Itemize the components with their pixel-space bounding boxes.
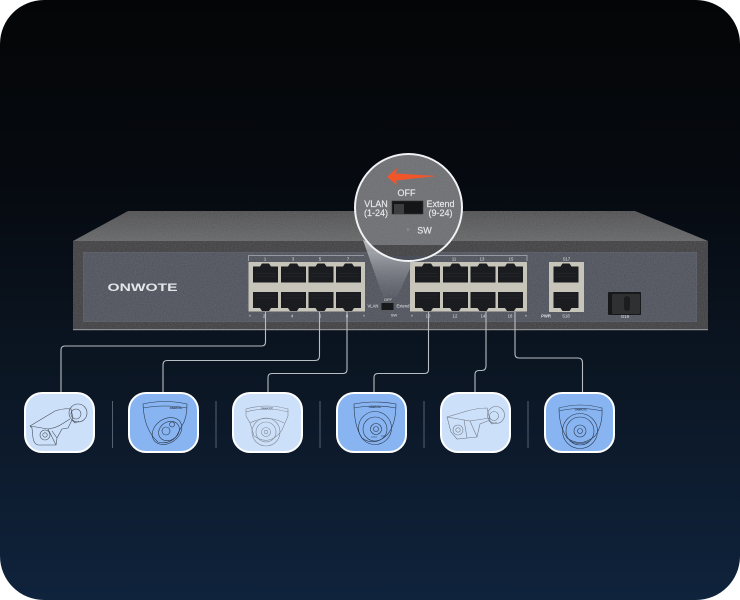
magnifier callout	[354, 153, 464, 263]
port numbers: +	[363, 314, 366, 318]
port numbers: +	[525, 314, 528, 318]
VLAN label: VLAN	[364, 199, 388, 209]
magnifier cone	[363, 240, 413, 297]
port numbers: +	[411, 314, 414, 318]
SFP port G19: G19	[621, 314, 630, 319]
port numbers	[249, 256, 528, 318]
uplink ports S17 and S18: PWR	[541, 314, 551, 318]
camera card 1: bullet	[25, 393, 94, 452]
small VLAN switch: VLAN	[368, 304, 378, 308]
port numbers: 8	[346, 314, 349, 318]
right port block	[410, 262, 527, 312]
magnified surface	[356, 155, 461, 245]
orange arrow	[387, 168, 437, 185]
port brackets	[248, 256, 527, 261]
dome brand mark: ONWOTE	[170, 406, 182, 410]
port numbers: 12	[453, 314, 458, 318]
port numbers: 1	[264, 256, 267, 262]
Extend label: Extend	[426, 199, 455, 209]
magnifier ring	[355, 154, 462, 261]
uplink ports S17 and S18: S18	[562, 314, 570, 318]
brand logo: ONWOTE	[108, 282, 178, 294]
uplink ports S17 and S18	[541, 256, 584, 318]
VLAN range label: (1-24)	[364, 208, 388, 218]
small VLAN switch: Extend	[396, 304, 410, 308]
turret brand mark: ONWOTE	[369, 405, 381, 409]
camera card 2: dome	[129, 393, 198, 452]
switch front frame	[73, 241, 708, 330]
small VLAN switch: OFF	[384, 297, 393, 302]
uplink ports S17 and S18: S17	[563, 256, 571, 262]
port numbers: 16	[508, 314, 513, 318]
port numbers: 6	[319, 314, 322, 318]
camera card 6: turret	[545, 393, 614, 452]
switch top face	[73, 211, 708, 241]
SW indicator light	[406, 228, 410, 231]
slide switch	[392, 201, 423, 214]
left port block	[248, 262, 365, 312]
turret brand mark: ONWOTE	[575, 408, 587, 412]
turret brand mark: ONWOTE	[261, 406, 273, 410]
port numbers: 5	[319, 256, 322, 262]
SFP port G19	[608, 292, 641, 319]
camera card 5: bullet	[441, 393, 510, 452]
port numbers: 10	[426, 314, 431, 318]
switch device	[73, 211, 708, 330]
switch front panel	[83, 252, 697, 322]
switch bottom edge highlight	[73, 329, 708, 330]
magnified front edge	[372, 245, 445, 256]
port numbers: 13	[480, 256, 485, 262]
port numbers: 14	[481, 314, 486, 318]
small VLAN switch	[368, 297, 410, 318]
port numbers: 15	[509, 256, 514, 262]
OFF label: OFF	[398, 188, 416, 198]
port numbers: 2	[263, 314, 266, 318]
port numbers: +	[249, 314, 252, 318]
camera card 3: turret	[233, 393, 302, 452]
camera card 4: turret	[337, 393, 406, 452]
connection lines	[61, 312, 582, 392]
port numbers: 4	[291, 314, 294, 318]
dividers	[112, 401, 528, 448]
port numbers: 7	[347, 256, 350, 262]
small VLAN switch: SW	[391, 312, 397, 318]
Extend range label: (9-24)	[428, 208, 453, 218]
port numbers: 3	[292, 256, 295, 262]
SW label: SW	[417, 226, 432, 236]
port numbers: 11	[452, 256, 457, 262]
